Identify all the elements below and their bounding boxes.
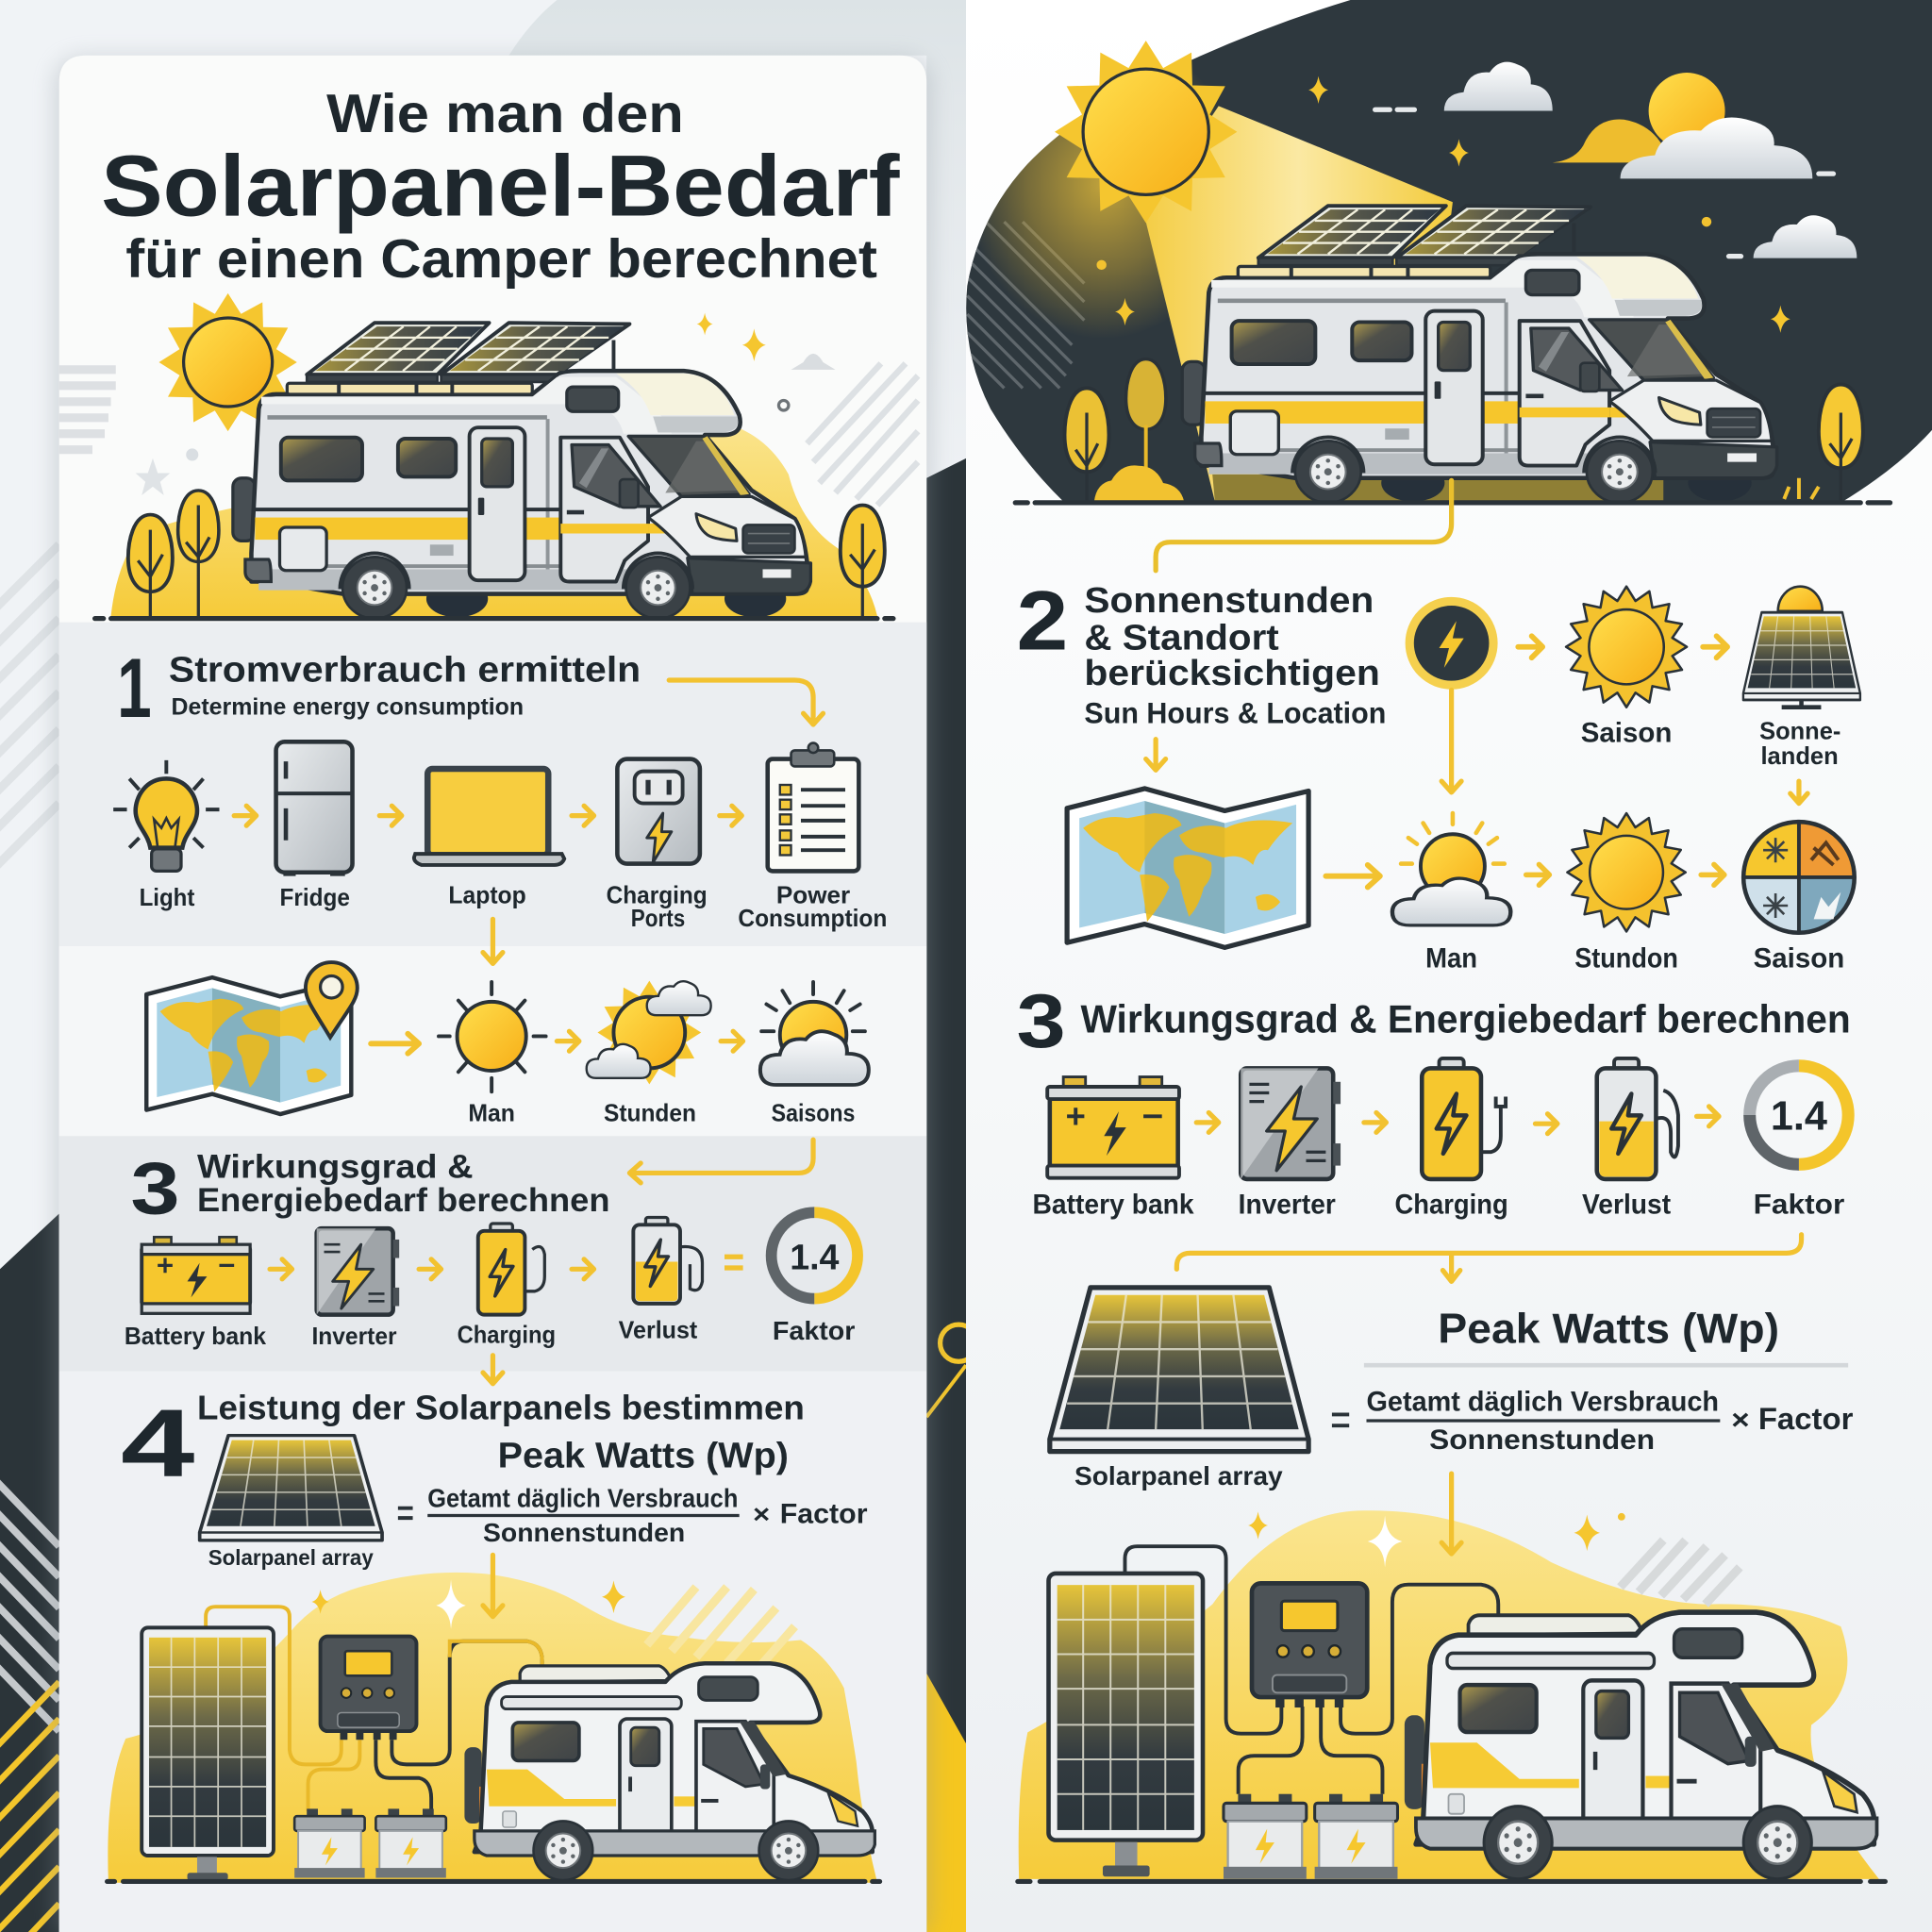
section 4: Leistung der Solarpanels (left) — [108, 1389, 880, 1883]
arrow — [720, 806, 741, 825]
icon: world map — [1067, 789, 1308, 947]
arrow — [1364, 1112, 1386, 1132]
label: Solarpanel array: Solarpanel array — [208, 1545, 374, 1570]
heading 1: Stromverbrauch ermitteln — [169, 650, 641, 690]
icon: sun with clouds — [587, 981, 711, 1084]
arrow: down to section 2 — [483, 919, 503, 963]
label: Saisons: Saisons — [772, 1099, 855, 1127]
arrow — [1196, 1112, 1219, 1132]
heading 3: Wirkungsgrad & Energiebedarf berechnen — [1080, 997, 1851, 1041]
arrow — [419, 1259, 441, 1279]
section 4: Solarpanel formula — [1018, 1288, 1885, 1881]
label: Verlust: Verlust — [1582, 1190, 1671, 1221]
heading 4: Leistung der Solarpanels bestimmen — [197, 1389, 805, 1427]
arrow: camper to section 2 — [1156, 480, 1452, 571]
formula: Peak Watts (Wp) — [1438, 1307, 1779, 1353]
panel: left infographic card — [54, 56, 931, 1932]
section 3: Wirkungsgrad (left) — [125, 1140, 858, 1384]
label: Laptop: Laptop — [448, 880, 526, 908]
arrow: down to map — [1146, 740, 1166, 770]
label: Faktor: Faktor — [1754, 1190, 1845, 1221]
arrow — [572, 806, 594, 825]
heading 3: Wirkungsgrad & — [197, 1149, 474, 1186]
arrow — [1518, 636, 1542, 658]
heading 2 — [1084, 581, 1386, 730]
icon: light bulb — [113, 760, 219, 871]
label: Charging: Charging — [1395, 1190, 1508, 1221]
formula: Factor — [780, 1498, 868, 1529]
factor ring: 1.4 — [790, 1238, 839, 1277]
label: Sonne-landen: Sonne- — [1759, 717, 1840, 745]
heading 2: & Standort — [1084, 618, 1279, 658]
arrow — [1697, 1107, 1719, 1126]
icon: battery — [142, 1237, 250, 1313]
icon: sun behind cloud — [1392, 813, 1510, 925]
arrow: from seasons to section 3 — [629, 1140, 813, 1183]
label: Power Consumption: Power — [776, 880, 850, 908]
label: Stunden: Stunden — [604, 1099, 696, 1127]
factor ring — [1750, 1066, 1848, 1164]
hero illustration: camper with solar panels — [59, 293, 918, 619]
formula — [1332, 1307, 1854, 1456]
formula: × — [1731, 1405, 1750, 1436]
arrow: to power consumption — [669, 680, 823, 724]
heading 1 — [169, 650, 641, 721]
formula: Peak Watts (Wp) — [498, 1437, 789, 1476]
arrow — [371, 1034, 419, 1054]
formula: × — [753, 1499, 770, 1528]
background — [0, 0, 977, 1932]
factor ring: 1.4 — [1771, 1094, 1827, 1140]
label: Faktor: Faktor — [773, 1316, 856, 1345]
icon: charging cell — [478, 1224, 544, 1315]
title: für einen Camper berechnet — [125, 229, 877, 290]
formula: Sonnenstunden — [1429, 1424, 1655, 1456]
step number 2: 2 — [1017, 574, 1068, 667]
icon: spiky sun — [1566, 587, 1687, 708]
icon: solar panel with sun — [1743, 587, 1860, 708]
label: Inverter: Inverter — [311, 1322, 397, 1350]
icon: charging cell — [1422, 1058, 1506, 1179]
title: Solarpanel-Bedarf — [101, 139, 900, 235]
section 3: Wirkungsgrad und Energiebedarf — [1017, 979, 1851, 1281]
arrow — [1703, 636, 1727, 658]
label: Light: Light — [140, 883, 195, 911]
label: Fridge: Fridge — [279, 883, 350, 911]
arrow — [1790, 781, 1807, 804]
arrow: connector to section 4 — [1176, 1235, 1802, 1281]
section 2: Sonnenstunden und Standort — [1017, 574, 1860, 974]
arrow — [1701, 864, 1724, 885]
title — [101, 84, 900, 290]
formula: Getamt däglich Versbrauch — [1366, 1387, 1719, 1418]
icon: loss cell — [1597, 1058, 1678, 1179]
arrow — [572, 1259, 594, 1279]
label: Inverter: Inverter — [1239, 1190, 1336, 1221]
arrow — [557, 1031, 579, 1051]
arrow — [379, 806, 402, 825]
arrow — [721, 1031, 743, 1051]
formula: Factor — [1758, 1401, 1854, 1436]
label: Power Consumption: Consumption — [738, 904, 887, 932]
section 1: Stromverbrauch ermitteln — [113, 641, 887, 963]
title: Wie man den — [326, 84, 684, 144]
icon: inverter — [317, 1228, 399, 1315]
icon: energy badge — [1409, 601, 1493, 685]
icon: loss cell — [633, 1217, 702, 1304]
arrow — [1535, 1114, 1557, 1134]
heading 3 — [197, 1149, 610, 1219]
formula: Getamt däglich Versbrauch — [427, 1483, 738, 1512]
label: Charging Ports — [607, 880, 708, 932]
arrow: badge to sun cloud — [1441, 690, 1461, 792]
arrow: down to section 4 — [483, 1356, 503, 1384]
step number 4: 4 — [121, 1390, 195, 1497]
arrow — [1325, 865, 1380, 887]
icon: charging port — [617, 759, 700, 864]
arrow — [270, 1259, 292, 1279]
section 2: sun hours and location (left) — [146, 962, 869, 1127]
icon: world map with pin — [146, 962, 358, 1114]
icon: fridge — [276, 741, 353, 874]
label: Sonne-landen — [1759, 717, 1840, 770]
arrow — [234, 806, 257, 825]
icon: equals sign — [724, 1257, 743, 1268]
icon: solar panel array — [1050, 1288, 1308, 1452]
icon: clipboard checklist — [768, 743, 858, 871]
icon: inverter — [1241, 1068, 1341, 1179]
label: Battery bank: Battery bank — [125, 1322, 267, 1350]
label: Power Consumption — [738, 880, 887, 932]
label: Verlust: Verlust — [619, 1315, 698, 1343]
label: Stundon: Stundon — [1574, 942, 1678, 974]
step number 1: 1 — [117, 641, 152, 735]
heading 3: Energiebedarf berechnen — [197, 1182, 610, 1219]
label: Solarpanel array: Solarpanel array — [1074, 1461, 1283, 1491]
icon: battery — [1047, 1077, 1179, 1178]
heading 2: berücksichtigen — [1084, 654, 1380, 693]
arrow — [1526, 864, 1549, 885]
label: Sonne-landen: landen — [1760, 741, 1839, 770]
icon: laptop — [414, 769, 564, 865]
label: Battery bank: Battery bank — [1033, 1190, 1194, 1221]
icon: solar panel array — [200, 1436, 382, 1541]
illustration: solar system to camper — [108, 1555, 880, 1883]
heading 2: Sonnenstunden — [1084, 581, 1374, 621]
step number 3: 3 — [1017, 979, 1066, 1064]
label: Man: Man — [1425, 942, 1477, 974]
icon: seasons wheel — [1743, 822, 1855, 933]
label: Saison: Saison — [1581, 717, 1672, 748]
hero illustration: dark sky with camper — [966, 0, 1932, 503]
icon: spiky sun — [1567, 813, 1686, 931]
label: Charging: Charging — [458, 1321, 556, 1349]
panel: right infographic — [966, 0, 1932, 1932]
heading 2: Sun Hours & Location — [1084, 697, 1386, 730]
label: Man: Man — [468, 1099, 515, 1127]
label: Charging Ports: Ports — [631, 904, 685, 932]
illustration: solar system to camper — [1018, 1474, 1885, 1881]
heading 1: Determine energy consumption — [172, 695, 524, 721]
formula — [398, 1437, 868, 1547]
formula: Sonnenstunden — [483, 1518, 685, 1547]
icon: sun — [439, 982, 546, 1091]
step number 3: 3 — [130, 1147, 180, 1230]
label: Saison: Saison — [1754, 942, 1844, 974]
label: Charging Ports: Charging — [607, 880, 708, 908]
icon: sun behind cloud — [760, 982, 869, 1085]
factor ring — [772, 1212, 858, 1299]
